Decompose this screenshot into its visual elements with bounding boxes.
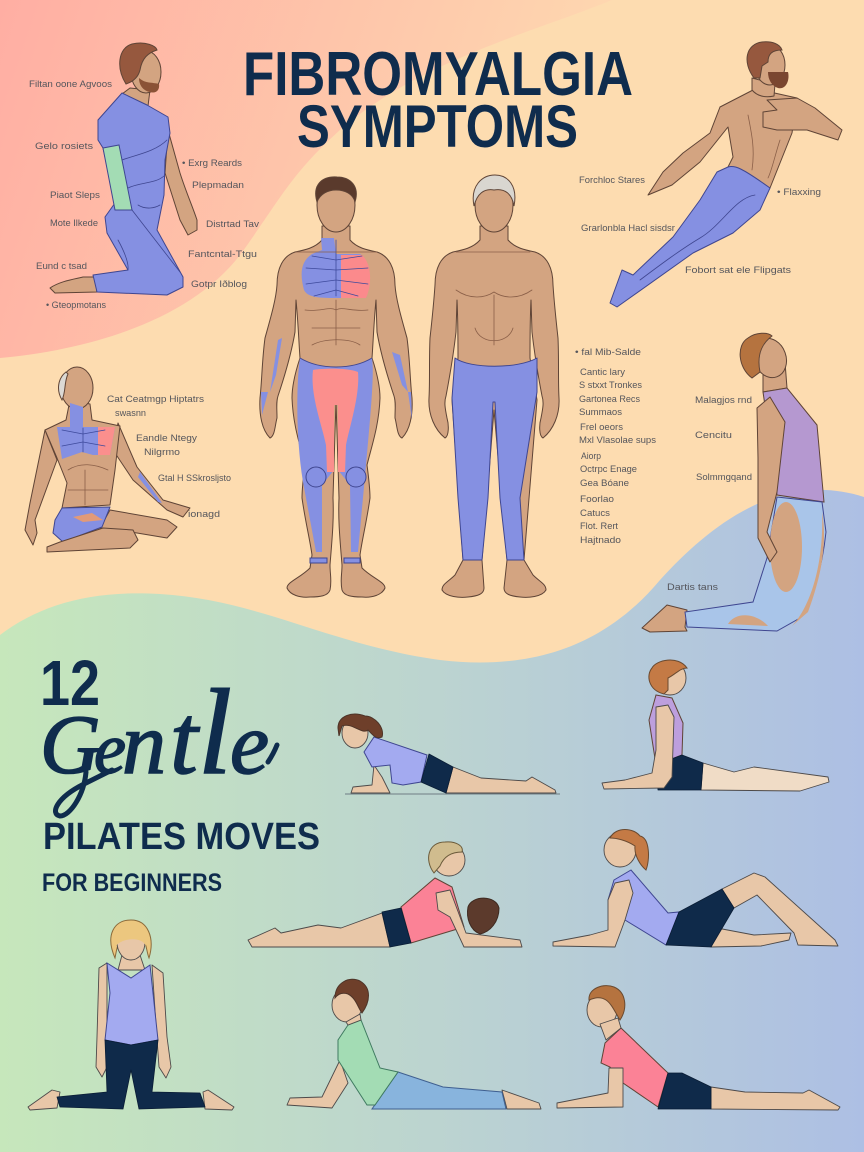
heading: 12 Gentle Pilates Moves: l [198, 665, 232, 800]
labels: symptoms list: • fal Mib-Salde [575, 347, 641, 358]
labels: kneeling man: • Exrg Reards [182, 158, 242, 169]
labels: seated man: Nilgrmo [144, 447, 180, 458]
labels: kneeling man: Fantcntal-Ttgu [188, 249, 257, 260]
exercise 1: prone press-up [338, 714, 560, 794]
exercise 7: press-up in pink shirt [557, 986, 840, 1110]
labels: symptoms list: Summaos [579, 407, 622, 418]
figure: standing man with highlighted pain areas [260, 177, 412, 597]
figure: seated older man [25, 367, 190, 552]
exercise 3: prone with arms forward [248, 842, 522, 947]
figure: kneeling woman looking up [642, 333, 826, 632]
labels: kneeling man: Filtan oone Agvoos [29, 79, 112, 90]
labels: kneeling woman: Cencitu [695, 430, 732, 441]
heading: 12 Gentle Pilates Moves: e [230, 696, 269, 793]
labels: symptoms list: Foorlao [580, 494, 614, 505]
heading: 12 Gentle Pilates Moves: FOR BEGINNERS [42, 869, 222, 897]
labels: kneeling man: Gelo rosiets [35, 141, 93, 152]
exercise 6: press-up in green shirt [287, 979, 541, 1109]
figure: kneeling man in blue [50, 43, 197, 295]
labels: symptoms list: Flot. Rert [580, 521, 618, 532]
labels: seated man: Gtal H SSkrosljsto [158, 473, 231, 484]
labels: seated man: Eandle Ntegy [136, 433, 197, 444]
labels: symptoms list: Mxl Vlasolae sups [579, 435, 656, 446]
labels: kneeling woman: Dartis tans [667, 582, 718, 593]
figure: standing older man in blue leggings [429, 175, 559, 597]
labels: kneeling woman: Malagjos rnd [695, 395, 752, 406]
labels: seated man: Cat Ceatmgp Hiptatrs [107, 394, 204, 405]
labels: kneeling man [29, 79, 259, 311]
labels: symptoms list: Catucs [580, 508, 610, 519]
heading: 12 Gentle Pilates Moves: PILATES MOVES [43, 816, 320, 858]
labels: kneeling woman [667, 395, 752, 593]
labels: floating man: Grarlonbla Hacl sisdsr [581, 223, 675, 234]
exercise 5: kneeling front view [28, 920, 234, 1110]
exercise 4: reclined knee bend [553, 830, 838, 947]
labels: seated man: swasnn [115, 408, 146, 419]
heading: 12 Gentle Pilates Moves: 12 [40, 647, 100, 719]
background shape: pink corner [0, 0, 612, 358]
figure: floating man with blue leggings [610, 42, 842, 307]
title: SYMPTOMS [297, 93, 578, 160]
heading: 12 Gentle Pilates Moves: t [170, 684, 200, 795]
heading: 12 Gentle Pilates Moves: G [40, 699, 101, 792]
labels: kneeling man: • Gteopmotans [46, 300, 106, 311]
labels: kneeling man: Distrtad Tav [206, 219, 259, 230]
labels: symptoms list: Gea Bóane [580, 478, 629, 489]
labels: symptoms list: Aiorp [581, 451, 601, 462]
labels: kneeling man: Mote Ilkede [50, 218, 98, 229]
background shape: lower gradient wave [0, 490, 864, 1152]
labels: symptoms list: Frel oeors [580, 422, 623, 433]
labels: floating man: Fobort sat ele Flipgats [685, 265, 791, 276]
labels: symptoms list: Gartonea Recs [579, 394, 640, 405]
heading: 12 Gentle Pilates Moves: n [122, 696, 166, 793]
labels: kneeling man: Plepmadan [192, 180, 244, 191]
labels: seated man [107, 394, 231, 520]
labels: kneeling woman: Solmmgqand [696, 472, 752, 483]
heading: 12 Gentle Pilates Moves: e [94, 709, 126, 789]
labels: kneeling man: Piaot Sleps [50, 190, 100, 201]
labels: floating man: • Flaxxing [777, 187, 821, 198]
title [243, 40, 633, 160]
labels: symptoms list: Hajtnado [580, 535, 621, 546]
labels: floating man [579, 175, 821, 276]
labels: symptoms list: S stxxt Tronkes [579, 380, 642, 391]
labels: floating man: Forchloc Stares [579, 175, 645, 186]
labels: kneeling man: Gotpr Iðblog [191, 279, 247, 290]
title: FIBROMYALGIA [243, 40, 633, 109]
exercise 2: seated leg extension [602, 660, 829, 791]
labels: symptoms list: Octrpc Enage [580, 464, 637, 475]
labels: symptoms list: Cantic lary [580, 367, 625, 378]
labels: seated man: ionagd [188, 509, 220, 520]
labels: kneeling man: Eund c tsad [36, 261, 87, 272]
heading: 12 Gentle Pilates Moves [40, 647, 320, 897]
labels: symptoms list [575, 347, 656, 546]
